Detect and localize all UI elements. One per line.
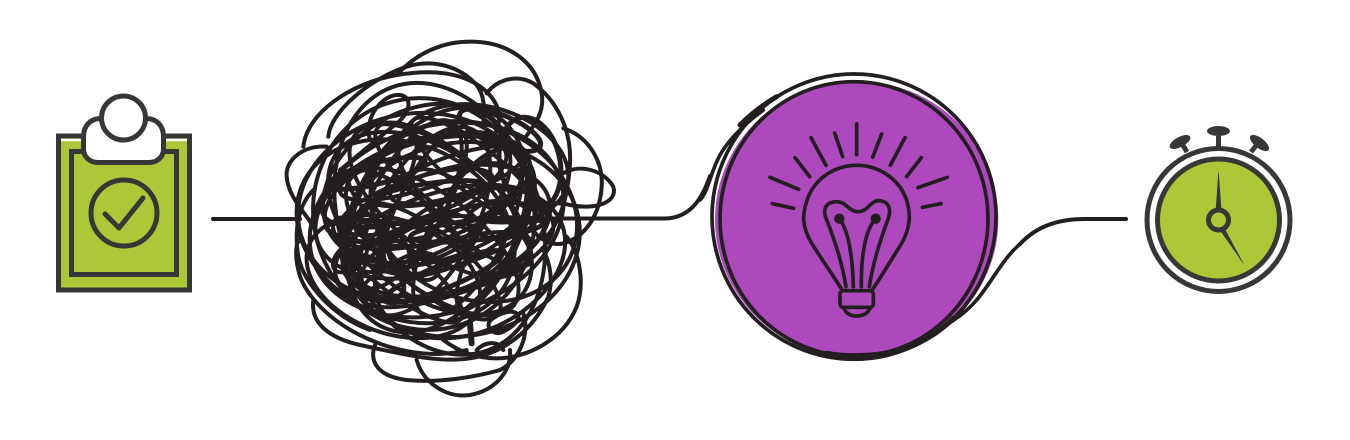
tangle family: off-centre outer loops bbox=[266, 53, 607, 385]
arrow: connector to the stopwatch bbox=[1020, 219, 1126, 244]
hand-drawn ring bbox=[700, 74, 1020, 359]
icon: stopwatch bbox=[1147, 126, 1290, 292]
tangle family: loops leaning down to the right bbox=[289, 78, 579, 358]
tangle: small inner curls bbox=[327, 196, 505, 280]
icon: clipboard with check mark bbox=[58, 96, 190, 290]
tangle: scribbled knot of lines bbox=[266, 42, 614, 395]
tangle family: dense dark bundles bbox=[326, 100, 569, 311]
tangle family: steep loops bbox=[307, 75, 567, 365]
icon: light bulb bbox=[770, 124, 947, 316]
tangle family: loops leaning up to the right bbox=[284, 91, 589, 349]
arrow: connector line through the tangle bbox=[213, 176, 710, 219]
panel: purple circle with light bulb bbox=[700, 74, 1020, 359]
purple disc bbox=[715, 81, 998, 358]
